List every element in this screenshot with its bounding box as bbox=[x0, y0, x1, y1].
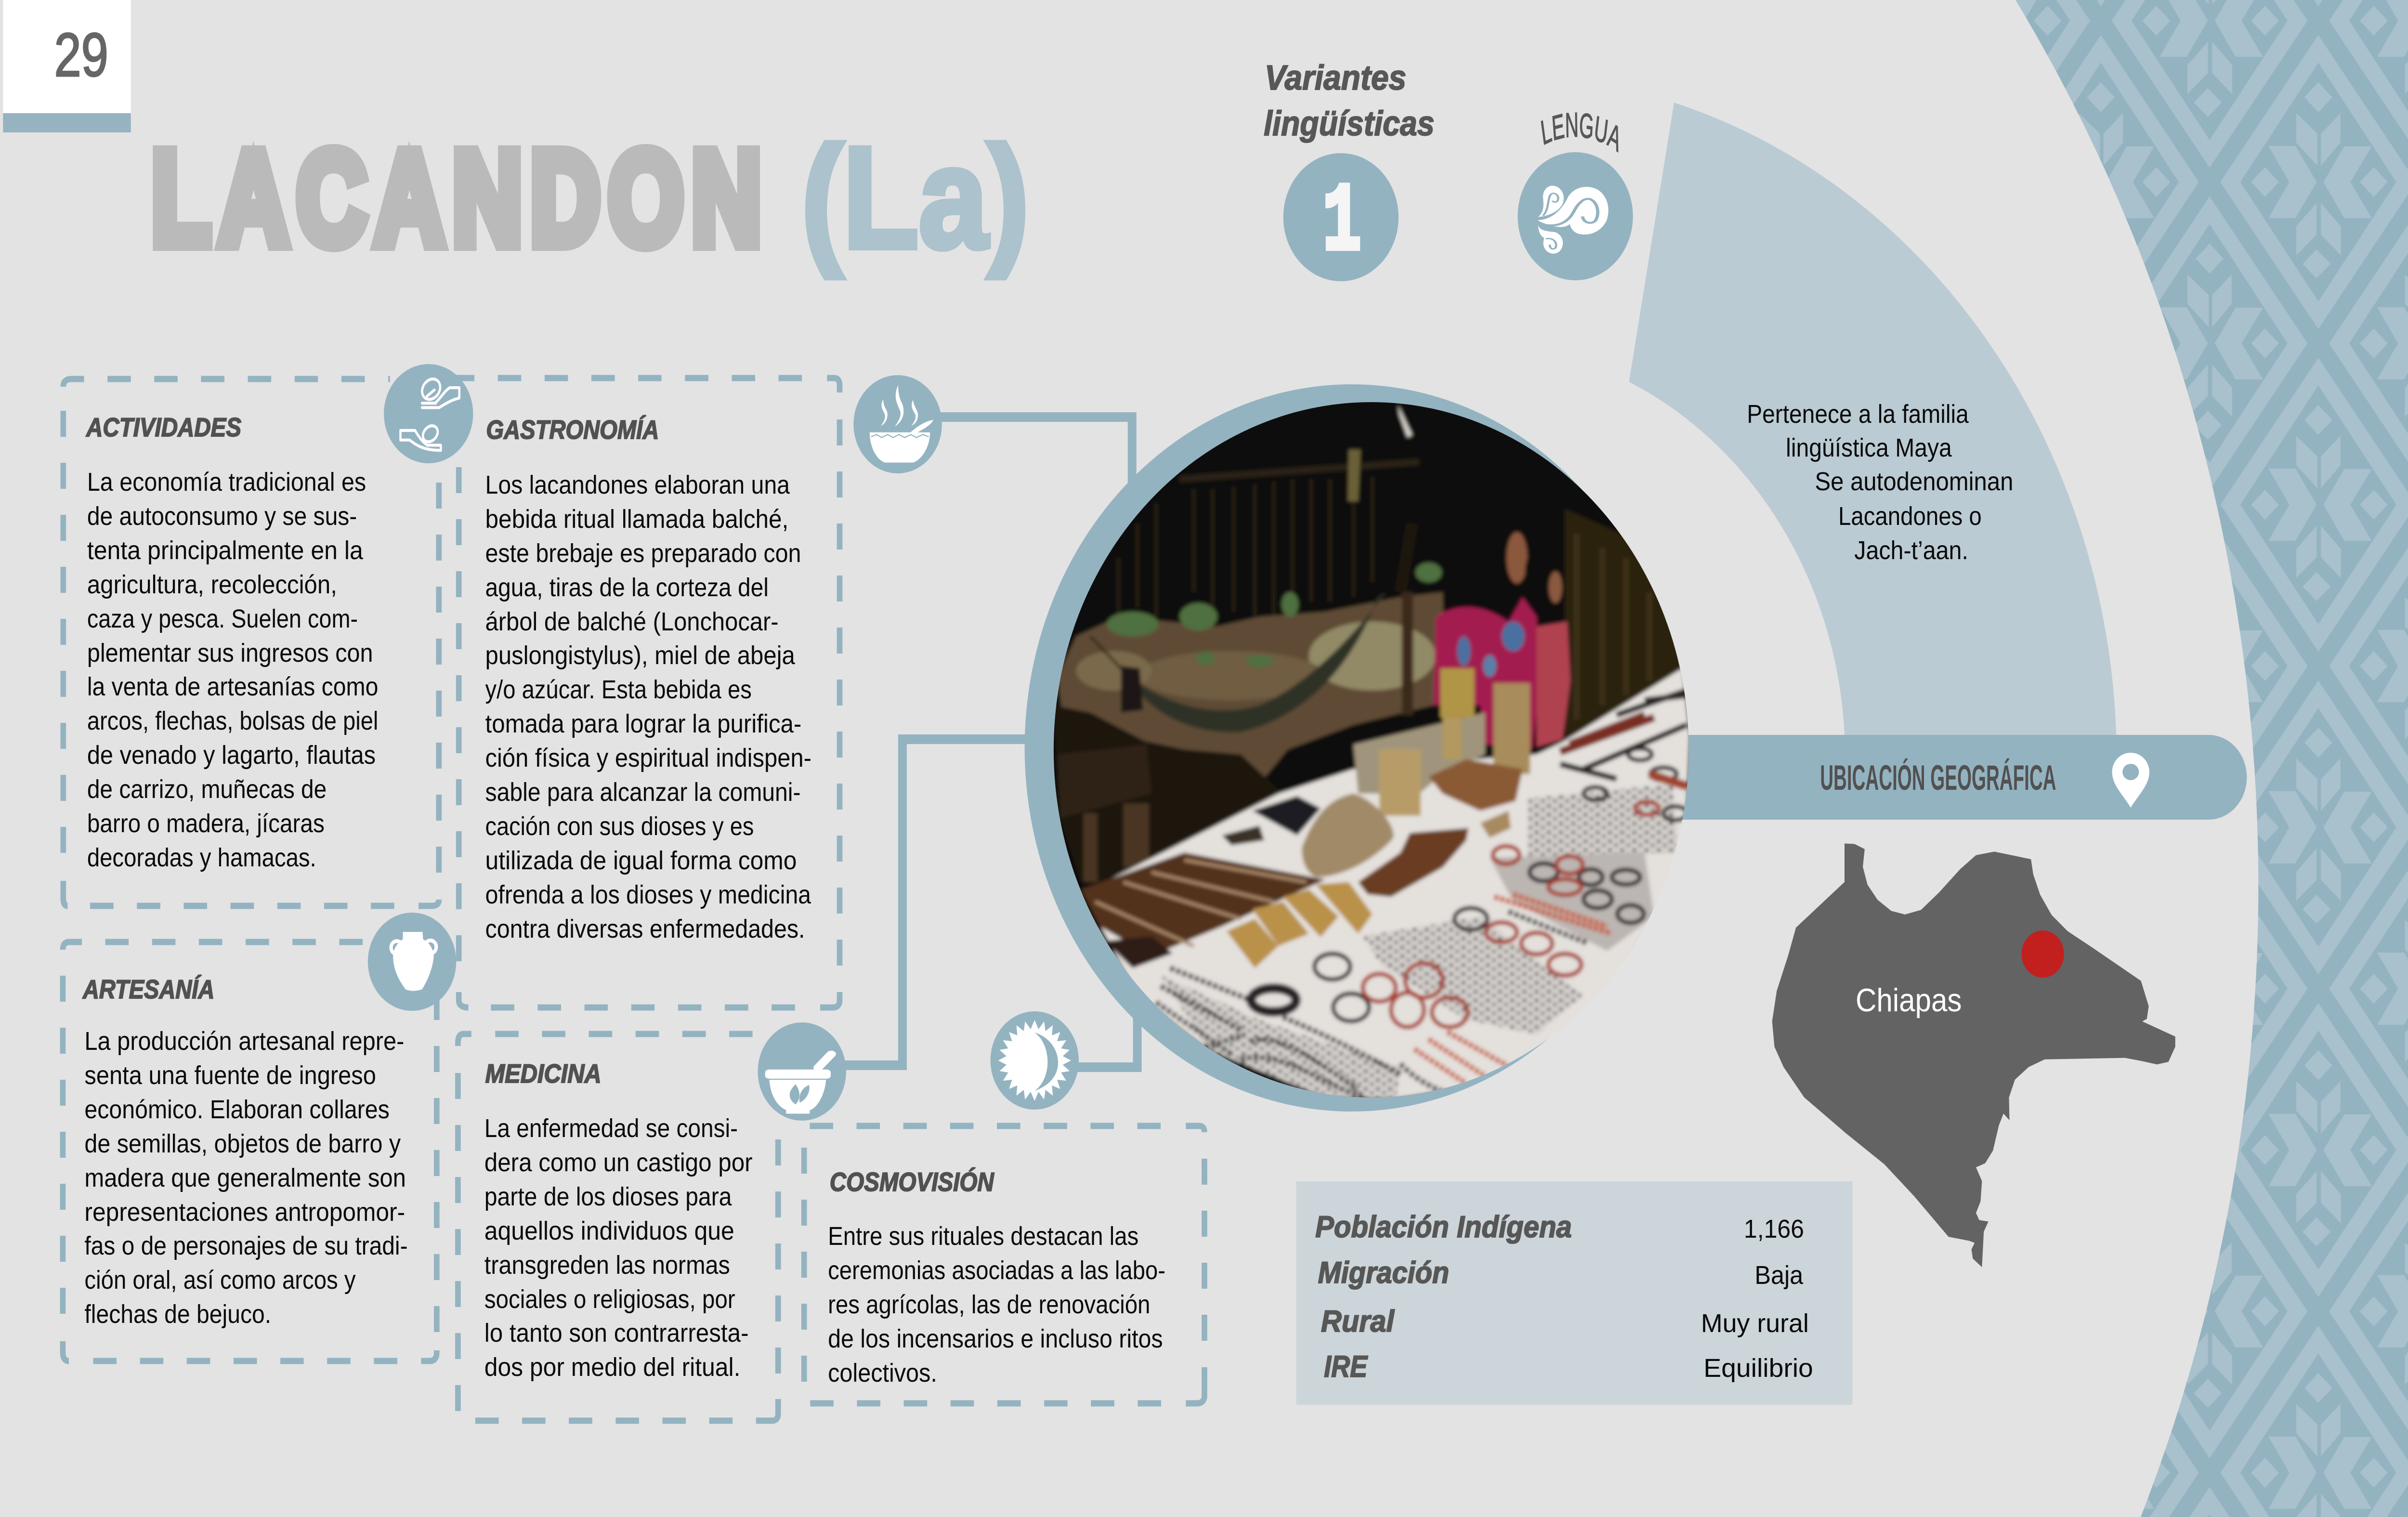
page number tab: 29 bbox=[54, 20, 108, 89]
text: actividades: agricultura, recolección, bbox=[87, 570, 337, 599]
text: gastronomía: contra diversas enfermedades. bbox=[485, 915, 805, 943]
connector lines bbox=[836, 417, 1137, 1067]
icon: mortar and pestle bbox=[758, 1022, 846, 1121]
text: actividades: barro o madera, jícaras bbox=[87, 809, 325, 838]
variantes lingüísticas label: lingüísticas bbox=[1264, 104, 1435, 143]
text: cosmovisión: ceremonias asociadas a las labo- bbox=[828, 1256, 1165, 1285]
heading: cosmovisión: COSMOVISIÓN bbox=[830, 1168, 995, 1197]
variantes count circle bbox=[1283, 153, 1399, 281]
text: artesanía: representaciones antropomor- bbox=[84, 1198, 405, 1227]
panel: cosmovisión bbox=[804, 1126, 1204, 1403]
icon: lengua swirl bbox=[1518, 152, 1633, 280]
row: migración: Migración bbox=[1318, 1255, 1449, 1290]
text: cosmovisión: colectivos. bbox=[828, 1359, 937, 1387]
text: gastronomía: ción física y espiritual indispen- bbox=[485, 744, 811, 772]
data table bbox=[1296, 1181, 1853, 1405]
background and woven pattern band bbox=[1950, 0, 2408, 1517]
row: rural: Rural bbox=[1321, 1304, 1395, 1338]
text: medicina: aquellos individuos que bbox=[484, 1216, 734, 1245]
arc panel text bbox=[1747, 400, 2013, 565]
text: cosmovisión bbox=[828, 1222, 1165, 1387]
text: medicina bbox=[484, 1114, 753, 1382]
location bar: UBICACIÓN GEOGRÁFICA bbox=[1820, 758, 2056, 798]
panel: medicina bbox=[458, 1034, 778, 1421]
text: actividades: arcos, flechas, bolsas de piel bbox=[87, 706, 378, 735]
page number tab bbox=[3, 0, 131, 132]
panel: artesanía bbox=[63, 942, 437, 1361]
text: medicina: sociales o religiosas, por bbox=[484, 1285, 735, 1314]
text: artesanía: económico. Elaboran collares bbox=[84, 1095, 390, 1124]
heading: artesanía: ARTESANÍA bbox=[82, 975, 214, 1005]
lengua curved label bbox=[1541, 112, 1618, 153]
text: artesanía: madera que generalmente son bbox=[84, 1164, 406, 1192]
text: medicina: parte de los dioses para bbox=[484, 1182, 732, 1211]
text: artesanía: flechas de bejuco. bbox=[84, 1300, 271, 1329]
text: actividades: de venado y lagarto, flautas bbox=[87, 741, 376, 770]
map label: Chiapas bbox=[1856, 981, 1962, 1019]
lengua curved label: LENGUA bbox=[1541, 112, 1618, 153]
title bbox=[152, 118, 1029, 279]
text: actividades: la venta de artesanías como bbox=[87, 672, 378, 701]
arc panel text: Pertenece a la familia bbox=[1747, 400, 1969, 429]
row: migración: Baja bbox=[1754, 1261, 1804, 1290]
variantes lingüísticas label bbox=[1264, 58, 1435, 143]
text: medicina: dos por medio del ritual. bbox=[484, 1353, 740, 1382]
text: medicina: dera como un castigo por bbox=[484, 1148, 753, 1177]
text: artesanía bbox=[84, 1027, 408, 1329]
map: Chiapas bbox=[1772, 843, 2175, 1267]
text: gastronomía: tomada para lograr la purifica- bbox=[485, 709, 801, 738]
icon: sun and moon bbox=[990, 1011, 1079, 1110]
map marker bbox=[2022, 930, 2064, 978]
text: gastronomía: utilizada de igual forma como bbox=[485, 846, 797, 875]
text: gastronomía: árbol de balché (Lonchocar- bbox=[485, 607, 779, 636]
text: gastronomía: ofrenda a los dioses y medicina bbox=[485, 880, 811, 909]
location bar bbox=[1646, 735, 2247, 820]
arc panel text: Lacandones o bbox=[1838, 502, 1982, 531]
text: gastronomía: sable para alcanzar la comuni- bbox=[485, 778, 800, 807]
text: artesanía: La producción artesanal repre- bbox=[84, 1027, 404, 1056]
text: actividades: de autoconsumo y se sus- bbox=[87, 502, 357, 531]
row: rural bbox=[1321, 1304, 1809, 1338]
text: artesanía: de semillas, objetos de barro y bbox=[84, 1129, 401, 1158]
text: gastronomía: Los lacandones elaboran una bbox=[485, 471, 790, 499]
text: medicina: lo tanto son contrarresta- bbox=[484, 1319, 749, 1347]
text: actividades: de carrizo, muñecas de bbox=[87, 775, 327, 804]
text: actividades: tenta principalmente en la bbox=[87, 536, 363, 565]
text: gastronomía bbox=[485, 471, 811, 943]
row: población indígena: 1,166 bbox=[1744, 1215, 1804, 1243]
text: actividades: La economía tradicional es bbox=[87, 468, 366, 497]
variantes count circle: 1 bbox=[1322, 169, 1361, 278]
panel: gastronomía bbox=[451, 378, 839, 1007]
heading: actividades: ACTIVIDADES bbox=[85, 413, 241, 443]
row: población indígena: Población Indígena bbox=[1315, 1210, 1572, 1244]
photo: market table with hammock bbox=[1044, 391, 1701, 1108]
title: (La) bbox=[801, 118, 1029, 279]
text: gastronomía: este brebaje es preparado con bbox=[485, 539, 801, 568]
icon: hands exchanging bbox=[384, 364, 473, 463]
arc panel text: Jach-t’aan. bbox=[1854, 536, 1968, 565]
text: cosmovisión: de los incensarios e incluso ritos bbox=[828, 1324, 1163, 1353]
text: artesanía: senta una fuente de ingreso bbox=[84, 1061, 376, 1090]
text: gastronomía: puslongistylus), miel de abeja bbox=[485, 641, 795, 670]
icon: map pin bbox=[2112, 753, 2149, 808]
text: gastronomía: bebida ritual llamada balché, bbox=[485, 505, 788, 534]
row: IRE: IRE bbox=[1324, 1349, 1368, 1384]
text: artesanía: fas o de personajes de su tradi- bbox=[84, 1231, 408, 1260]
row: IRE: Equilibrio bbox=[1703, 1354, 1813, 1383]
text: cosmovisión: res agrícolas, las de renovación bbox=[828, 1290, 1150, 1319]
icon: steaming bowl bbox=[853, 375, 942, 473]
text: actividades bbox=[87, 468, 378, 872]
variantes lingüísticas label: Variantes bbox=[1265, 58, 1406, 97]
heading: medicina: MEDICINA bbox=[485, 1059, 602, 1089]
heading: gastronomía: GASTRONOMÍA bbox=[486, 416, 659, 445]
text: gastronomía: cación con sus dioses y es bbox=[485, 812, 754, 841]
title: LACANDON bbox=[152, 124, 770, 272]
arc panel text: lingüística Maya bbox=[1786, 433, 1952, 462]
arc panel: language family bbox=[1629, 103, 2117, 739]
row: rural: Muy rural bbox=[1701, 1309, 1809, 1338]
panel: actividades bbox=[63, 379, 439, 906]
row: IRE bbox=[1324, 1349, 1813, 1384]
row: población indígena bbox=[1315, 1210, 1804, 1244]
row: migración bbox=[1318, 1255, 1804, 1290]
icon: clay vessel bbox=[368, 913, 456, 1011]
text: actividades: caza y pesca. Suelen com- bbox=[87, 604, 358, 633]
arc panel text: Se autodenominan bbox=[1815, 467, 2013, 496]
text: artesanía: ción oral, así como arcos y bbox=[84, 1266, 356, 1295]
text: gastronomía: y/o azúcar. Esta bebida es bbox=[485, 675, 752, 704]
photo ring bbox=[1025, 384, 1679, 1112]
text: actividades: plementar sus ingresos con bbox=[87, 639, 373, 667]
text: medicina: transgreden las normas bbox=[484, 1251, 730, 1280]
text: medicina: La enfermedad se consi- bbox=[484, 1114, 738, 1143]
text: gastronomía: agua, tiras de la corteza del bbox=[485, 573, 769, 602]
text: cosmovisión: Entre sus rituales destacan las bbox=[828, 1222, 1139, 1251]
text: actividades: decoradas y hamacas. bbox=[87, 843, 316, 872]
